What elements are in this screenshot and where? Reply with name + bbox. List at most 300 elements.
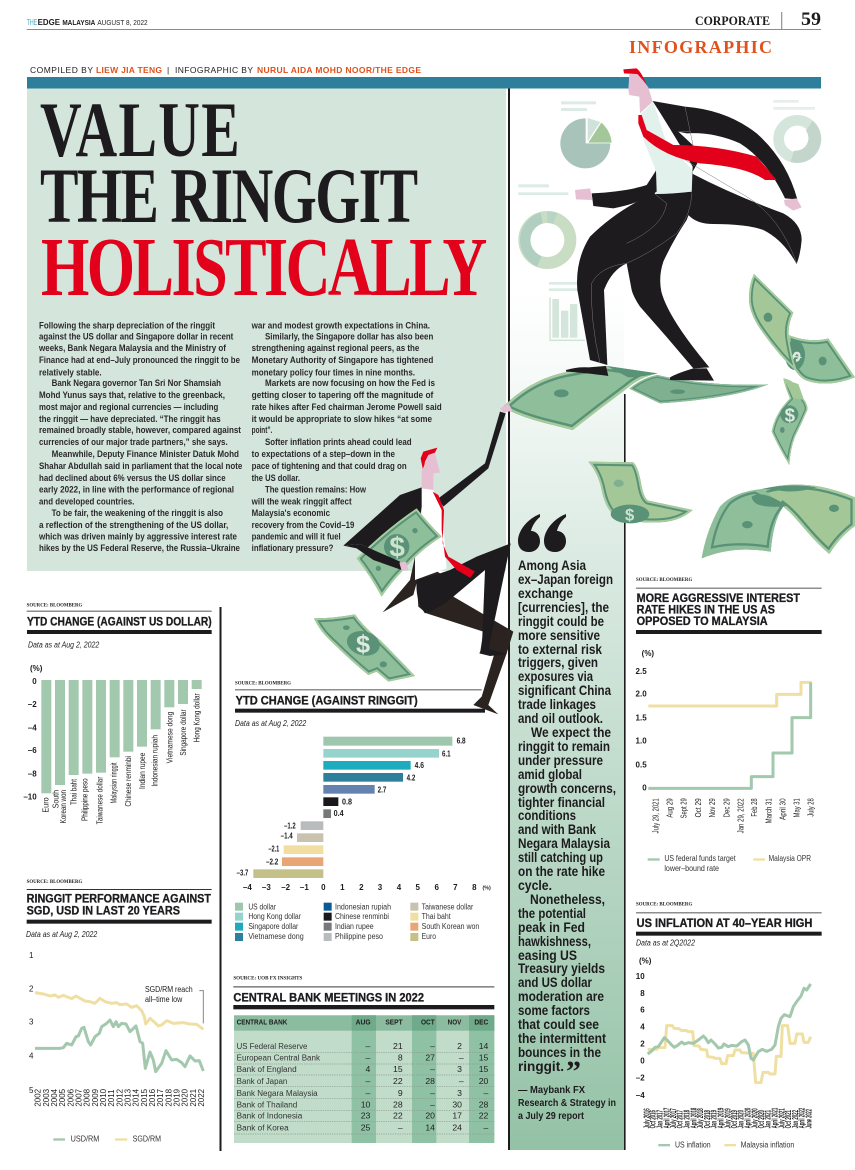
chart: ringgit performance against SGD and USD: all–time low <box>145 995 183 1004</box>
credits line: NURUL AIDA MOHD NOOR/THE EDGE <box>257 65 421 75</box>
table: central bank meetings in 2022: Bank of Japan <box>237 1077 287 1086</box>
chart: YTD change against US dollar: SOURCE: BLOOMBERG <box>27 603 83 609</box>
chart: US inflation at 40-year high <box>636 902 822 1149</box>
chart: ringgit performance against SGD and USD: SGD/RM <box>133 1135 161 1144</box>
chart: ringgit performance against SGD and USD: USD/RM <box>71 1135 99 1144</box>
table: central bank meetings in 2022: 20 <box>479 1076 489 1086</box>
masthead: THE <box>27 18 37 27</box>
table: central bank meetings in 2022: 17 <box>452 1111 462 1121</box>
table: central bank meetings in 2022: 28 <box>425 1076 435 1086</box>
chart: US vs Malaysia interest rates: RATE HIKES IN THE US AS <box>637 604 775 617</box>
credits line <box>30 65 421 75</box>
table: central bank meetings in 2022: Bank of Korea <box>237 1124 289 1133</box>
chart: YTD change against ringgit: 4 <box>397 883 402 892</box>
illustration: businessman carrying banknotes <box>314 403 513 714</box>
chart: YTD change against ringgit: –2.1 <box>268 845 280 854</box>
article text: inflationary pressure? <box>252 543 334 553</box>
chart: US inflation at 40-year high: Oct 2021 <box>784 1110 793 1128</box>
article text: Following the sharp depreciation of the ringgit <box>39 320 215 330</box>
head and hands <box>399 403 513 571</box>
shoe <box>479 644 507 656</box>
chart: ringgit performance against SGD and USD: 2006 <box>66 1088 75 1107</box>
chart: YTD change against ringgit: (%) <box>483 885 491 891</box>
article text: a reflection of the strengthening of the US dollar, <box>39 520 228 530</box>
pull quote text: growth concerns, <box>518 780 616 796</box>
chart: US vs Malaysia interest rates: 1.0 <box>636 737 647 746</box>
table: central bank meetings in 2022: 27 <box>425 1052 435 1062</box>
chart: US vs Malaysia interest rates: Aug 29 <box>666 798 675 818</box>
illustration: businessman carrying banknotes: $ <box>356 630 370 658</box>
section label and page number: CORPORATE <box>695 13 770 28</box>
pull quote text <box>518 557 616 1088</box>
chart: YTD change against ringgit: 2.7 <box>378 786 387 795</box>
chart: YTD change against US dollar: Korean won <box>59 790 68 823</box>
headline panel background <box>27 88 506 571</box>
table: central bank meetings in 2022: – <box>398 1123 403 1133</box>
chart: ringgit performance against SGD and USD: 4 <box>29 1052 34 1061</box>
table: central bank meetings in 2022: 21 <box>393 1041 403 1051</box>
chart: US inflation at 40-year high: Oct 2020 <box>757 1110 766 1128</box>
article text: Similarly, the Singapore dollar has also been <box>265 331 434 341</box>
chart: US vs Malaysia interest rates: March 31 <box>765 798 774 823</box>
pull quote text: some factors <box>518 1002 590 1018</box>
chart: YTD change against ringgit: –4 <box>243 883 252 892</box>
table: central bank meetings in 2022: AUG <box>356 1020 371 1027</box>
chart: YTD change against US dollar: 0 <box>32 677 37 686</box>
table: central bank meetings in 2022: 15 <box>479 1064 489 1074</box>
table: central bank meetings in 2022: – <box>484 1088 489 1098</box>
chart: YTD change against ringgit: 6.8 <box>457 737 466 746</box>
article text: Shahar Abdullah said in parliament that the local note <box>39 461 242 471</box>
table: central bank meetings in 2022: SOURCE: UOB FX INSIGHTS <box>233 976 302 982</box>
chart: ringgit performance against SGD and USD: 2005 <box>58 1088 67 1107</box>
chart: YTD change against US dollar: South <box>51 790 60 808</box>
pull quote text: amid global <box>518 766 582 782</box>
table: central bank meetings in 2022: CENTRAL BANK MEETINGS IN 2022 <box>233 991 424 1004</box>
chart: ringgit performance against SGD and USD: 2004 <box>50 1088 59 1107</box>
article text: had declined about 6% versus the US dollar since <box>39 473 226 483</box>
table: central bank meetings in 2022: DEC <box>474 1020 488 1027</box>
teal band <box>27 77 821 88</box>
article text: the ringgit — have depreciated. “The ringgit has <box>39 414 221 424</box>
title: HOLISTICALLY <box>41 220 487 313</box>
chart: YTD change against ringgit: 8 <box>472 883 477 892</box>
quote mark <box>518 514 566 552</box>
title: THE RINGGIT <box>40 153 418 239</box>
pull quote text: Nonetheless, <box>530 891 605 907</box>
chart: ringgit performance against SGD and USD: 2015 <box>140 1088 149 1107</box>
chart: US vs Malaysia interest rates: MORE AGGRESSIVE INTEREST <box>637 592 800 605</box>
table: central bank meetings in 2022: CENTRAL BANK <box>237 1020 287 1027</box>
pull quote text: ringgit to remain <box>518 738 610 754</box>
masthead: EDGE <box>38 18 61 27</box>
chart: US vs Malaysia interest rates: Nov 29 <box>708 798 717 817</box>
pull quote text: and oil outlook. <box>518 710 603 726</box>
chart: ringgit performance against SGD and USD: 1 <box>29 951 34 960</box>
table: central bank meetings in 2022: European Central Bank <box>237 1053 320 1062</box>
sleeve <box>592 171 657 208</box>
pull quote text: bounces in the <box>518 1044 601 1060</box>
chart: YTD change against ringgit <box>235 681 491 941</box>
carried banknote <box>357 508 442 597</box>
chart: ringgit performance against SGD and USD: 3 <box>29 1018 34 1027</box>
pull quote text: cycle. <box>518 877 552 893</box>
chart: YTD change against ringgit: Data as at Aug 2, 2022 <box>235 719 307 728</box>
chart: YTD change against ringgit: Singapore dollar <box>248 922 299 931</box>
chart: US vs Malaysia interest rates <box>636 577 822 873</box>
chart: YTD change against ringgit: Philippine peso <box>335 932 383 941</box>
article text: getting closer to tapering off the magnitude of <box>252 390 434 400</box>
hair <box>421 448 437 472</box>
article text: the US dollar. <box>252 473 300 483</box>
table: central bank meetings in 2022: 14 <box>479 1041 489 1051</box>
title: VALUE <box>40 87 240 173</box>
chart: YTD change against US dollar: YTD CHANGE (AGAINST US DOLLAR) <box>27 615 212 628</box>
chart: US inflation at 40-year high: Oct 2019 <box>730 1110 739 1128</box>
chart: YTD change against ringgit: YTD CHANGE (AGAINST RINGGIT) <box>236 694 418 707</box>
chart: YTD change against US dollar: Thai baht <box>69 778 78 805</box>
pull quote text: under pressure <box>518 752 603 768</box>
pull quote text: Treasury yields <box>518 960 605 976</box>
title <box>40 87 487 313</box>
table: central bank meetings in 2022: 22 <box>393 1111 403 1121</box>
illustration: falling banknotes: $ <box>781 348 805 364</box>
chart: US inflation at 40-year high: July 2018 <box>696 1108 705 1128</box>
chart: YTD change against US dollar: Hong Kong dollar <box>192 693 201 742</box>
chart: ringgit performance against SGD and USD: 2007 <box>74 1088 83 1107</box>
chart: ringgit performance against SGD and USD: 2016 <box>148 1088 157 1107</box>
table: central bank meetings in 2022: 3 <box>457 1088 462 1098</box>
article text: which was driven mainly by aggressive interest rate <box>38 531 237 541</box>
article text: recovery from the Covid–19 <box>252 520 354 530</box>
background charts behind the figure <box>518 100 821 291</box>
chart: YTD change against ringgit: –3 <box>262 883 271 892</box>
chart: US inflation at 40-year high: April 2019 <box>716 1107 725 1128</box>
chart: ringgit performance against SGD and USD: 2 <box>29 984 34 993</box>
tie <box>638 115 777 180</box>
pull quote text: exposures via <box>518 668 593 684</box>
chart: US inflation at 40-year high: Data as at 2Q2022 <box>636 939 695 948</box>
chart: ringgit performance against SGD and USD: 2017 <box>156 1088 165 1107</box>
chart: YTD change against US dollar: Euro <box>41 797 50 813</box>
table: central bank meetings in 2022: 15 <box>479 1052 489 1062</box>
forearm <box>343 544 402 570</box>
table: central bank meetings in 2022: OCT <box>421 1020 435 1027</box>
article text: hikes by the US Federal Reserve, the Russia–Ukraine <box>39 543 240 553</box>
masthead: MALAYSIA <box>62 18 96 27</box>
article text: Meanwhile, Deputy Finance Minister Datuk Mohd <box>52 449 239 459</box>
article text: will the weak ringgit affect <box>251 496 352 506</box>
chart: US vs Malaysia interest rates: Oct 29 <box>694 798 703 817</box>
chart: YTD change against US dollar: (%) <box>30 664 43 673</box>
article text: war and modest growth expectations in China. <box>251 320 430 330</box>
table: central bank meetings in 2022: 30 <box>452 1099 462 1109</box>
chart: YTD change against US dollar: –8 <box>28 769 37 778</box>
chart: YTD change against ringgit: Indian rupee <box>335 922 374 931</box>
article text: and developed countries. <box>39 496 134 506</box>
table: central bank meetings in 2022: Bank of Indonesia <box>237 1112 303 1121</box>
article text: monetary policy four times in nine months. <box>252 367 415 377</box>
chart: US inflation at 40-year high: Malaysia inflation <box>741 1140 794 1149</box>
article text: early 2022, in line with the performance of regional <box>39 484 234 494</box>
pull quote text: conditions <box>518 807 576 823</box>
quote attribution: Research & Strategy in <box>518 1097 616 1109</box>
pull quote text: exchange <box>518 585 573 601</box>
article text: Softer inflation prints ahead could lead <box>265 437 412 447</box>
shirt <box>415 487 447 580</box>
table: central bank meetings in 2022: 8 <box>398 1052 403 1062</box>
chart: US inflation at 40-year high: 8 <box>640 989 645 998</box>
chart: YTD change against ringgit: 0.4 <box>334 809 344 818</box>
chart: US vs Malaysia interest rates: 2.5 <box>636 667 647 676</box>
chart: YTD change against US dollar: Indonesian rupiah <box>151 735 160 787</box>
illustration: businessman carrying banknotes: $ <box>389 532 405 563</box>
chart: ringgit performance against SGD and USD: 2002 <box>34 1088 43 1107</box>
chart: YTD change against ringgit: South Korean won <box>422 922 479 931</box>
chart: US inflation at 40-year high: Jan 2017 <box>656 1110 665 1128</box>
chart: ringgit performance against SGD and USD: 2014 <box>132 1088 141 1107</box>
pull quote text: and US dollar <box>518 974 592 990</box>
chart: YTD change against US dollar: Philippine peso <box>81 778 90 821</box>
chart: ringgit performance against SGD and USD: 2013 <box>123 1088 132 1107</box>
chart: YTD change against ringgit: Hong Kong dollar <box>248 912 301 921</box>
article text: weeks, Bank Negara Malaysia and the Ministry of <box>38 343 227 353</box>
chart: ringgit performance against SGD and USD: 2022 <box>197 1088 206 1107</box>
table: central bank meetings in 2022: – <box>366 1076 371 1086</box>
article text: Bank Negara governor Tan Sri Nor Shamsiah <box>52 378 221 388</box>
pull quote text: Negara Malaysia <box>518 835 610 851</box>
chart: YTD change against ringgit: Taiwanese dollar <box>422 903 474 912</box>
chart: YTD change against ringgit: 0 <box>321 883 326 892</box>
article text: most major and regional currencies — including <box>39 402 219 412</box>
chart: ringgit performance against SGD and USD: RINGGIT PERFORMANCE AGAINST <box>27 893 211 906</box>
chart: YTD change against ringgit: –1 <box>300 883 309 892</box>
chart: ringgit performance against SGD and USD: SOURCE: BLOOMBERG <box>27 879 83 885</box>
table: central bank meetings in 2022: NOV <box>448 1020 462 1027</box>
pull quote text: [currencies], the <box>518 599 609 615</box>
chart: ringgit performance against SGD and USD: 2011 <box>107 1089 116 1107</box>
table: central bank meetings in 2022: 15 <box>393 1064 403 1074</box>
table: central bank meetings in 2022: 22 <box>393 1076 403 1086</box>
table: central bank meetings in 2022: 4 <box>366 1064 371 1074</box>
table: central bank meetings in 2022: – <box>459 1076 464 1086</box>
article text: pace of tightening and that could drag on <box>252 461 407 471</box>
quote panel background <box>510 290 624 1150</box>
chart: ringgit performance against SGD and USD: 2003 <box>42 1088 51 1107</box>
pull quote text: on the rate hike <box>518 863 605 879</box>
pull quote text: more sensitive <box>518 627 600 643</box>
chart: ringgit performance against SGD and USD: SGD, USD IN LAST 20 YEARS <box>27 905 180 918</box>
table: central bank meetings in 2022: – <box>459 1052 464 1062</box>
chart: US vs Malaysia interest rates: Dec 29 <box>722 798 731 817</box>
article text: To be fair, the weakening of the ringgit is also <box>52 508 223 518</box>
pull quote text: moderation are <box>518 988 604 1004</box>
article text: remained broadly stable, however, compared against <box>39 425 241 435</box>
chart: US vs Malaysia interest rates: April 30 <box>778 798 787 820</box>
chart: YTD change against US dollar: –4 <box>28 723 37 732</box>
table: central bank meetings in 2022: 24 <box>452 1123 462 1133</box>
table: central bank meetings in 2022: – <box>484 1123 489 1133</box>
pull quote text: that could see <box>518 1016 599 1032</box>
table: central bank meetings in 2022: – <box>366 1088 371 1098</box>
chart: US inflation at 40-year high: July 2021 <box>777 1108 786 1128</box>
chart: YTD change against ringgit: –1.2 <box>284 822 296 831</box>
divider rules <box>220 88 626 1151</box>
chart: YTD change against ringgit: 6 <box>434 883 439 892</box>
quote attribution: a July 29 report <box>518 1110 584 1122</box>
shoes <box>566 366 714 381</box>
chart: US inflation at 40-year high: 6 <box>640 1006 645 1015</box>
table: central bank meetings in 2022: 9 <box>398 1088 403 1098</box>
article text: strengthening against regional peers, as the <box>252 343 419 353</box>
credits line: LIEW JIA TENG <box>96 65 162 75</box>
chart: US inflation at 40-year high: April 2020 <box>743 1107 752 1128</box>
chart: US vs Malaysia interest rates: Feb 28 <box>750 798 759 817</box>
table: central bank meetings in 2022: – <box>430 1088 435 1098</box>
chart: YTD change against US dollar <box>23 603 212 824</box>
hair <box>623 68 647 87</box>
chart: US inflation at 40-year high: July 2016 <box>643 1108 652 1128</box>
masthead: AUGUST 8, 2022 <box>97 18 148 27</box>
table: central bank meetings in 2022: – <box>430 1064 435 1074</box>
table: central bank meetings in 2022: 23 <box>361 1111 371 1121</box>
article text: it would be appropriate to slow hikes “at some <box>252 414 432 424</box>
chart: ringgit performance against SGD and USD: 2010 <box>99 1088 108 1107</box>
table: central bank meetings in 2022: 10 <box>361 1099 371 1109</box>
table: central bank meetings in 2022: – <box>366 1052 371 1062</box>
credits line: | <box>167 65 169 75</box>
article text: point”. <box>252 425 272 435</box>
table: central bank meetings in 2022: – <box>430 1099 435 1109</box>
infographic label: INFOGRAPHIC <box>629 37 772 57</box>
pull quote text: Among Asia <box>518 557 586 573</box>
chart: ringgit performance against SGD and USD <box>26 879 212 1144</box>
chart: US vs Malaysia interest rates: 1.5 <box>636 714 647 723</box>
chart: US inflation at 40-year high: April 2022 <box>798 1107 807 1128</box>
chart: YTD change against ringgit: Thai baht <box>422 912 451 921</box>
chart: YTD change against US dollar: Taiwanese dollar <box>96 776 105 824</box>
article text: relatively stable. <box>39 367 102 377</box>
chart: YTD change against US dollar: Vietnamese dong <box>166 712 175 763</box>
chart: YTD change against ringgit: –2.2 <box>266 857 279 866</box>
chart: US vs Malaysia interest rates: Jan 29, 2022 <box>737 798 746 833</box>
masthead <box>27 18 821 30</box>
table: central bank meetings in 2022 <box>233 976 494 1143</box>
chart: YTD change against US dollar: Indian rupee <box>138 752 147 789</box>
article text: Markets are now focusing on how the Fed is <box>265 378 435 388</box>
chart: US inflation at 40-year high: Jan 2021 <box>764 1110 773 1128</box>
chart: US vs Malaysia interest rates: (%) <box>642 649 654 658</box>
table: central bank meetings in 2022: 20 <box>425 1111 435 1121</box>
chart: YTD change against ringgit: –3.7 <box>237 868 249 877</box>
chart: US inflation at 40-year high: Oct 2017 <box>676 1110 685 1128</box>
pull quote text: the potential <box>518 905 586 921</box>
pull quote text: peak in Fed <box>518 919 585 935</box>
chart: US inflation at 40-year high: Jan 2022 <box>791 1110 800 1128</box>
chart: US inflation at 40-year high: US INFLATION AT 40–YEAR HIGH <box>637 917 812 930</box>
pull quote text: to external risk <box>518 641 602 657</box>
shirt <box>640 102 693 194</box>
chart: YTD change against US dollar: Singapore dollar <box>179 709 188 756</box>
pull quote text: ” <box>566 1055 581 1088</box>
chart: YTD change against ringgit: –1.4 <box>281 832 293 841</box>
article text: rate hikes after Fed chairman Jerome Powell said <box>252 402 442 412</box>
chart: US inflation at 40-year high: –4 <box>636 1091 645 1100</box>
article text <box>38 320 442 553</box>
jacket tail <box>383 557 418 612</box>
chart: US inflation at 40-year high: Jan 2019 <box>710 1110 719 1128</box>
chart: YTD change against ringgit: 4.6 <box>415 761 424 770</box>
chart: US inflation at 40-year high: July 2020 <box>750 1108 759 1128</box>
jacket seams <box>591 107 797 363</box>
chart: US vs Malaysia interest rates: 0 <box>642 784 647 793</box>
rear leg <box>415 557 513 714</box>
jacket <box>343 412 511 653</box>
article text: The question remains: How <box>265 484 367 494</box>
illustration: businessman running on banknotes <box>566 68 802 381</box>
chart: YTD change against US dollar: –2 <box>28 700 37 709</box>
chart: US inflation at 40-year high: 0 <box>640 1057 645 1066</box>
chart: YTD change against ringgit: 1 <box>340 883 345 892</box>
table: central bank meetings in 2022: 25 <box>361 1123 371 1133</box>
pull quote text: ringgit could be <box>518 613 604 629</box>
table: central bank meetings in 2022: – <box>366 1041 371 1051</box>
trousers <box>577 192 709 368</box>
chart: US vs Malaysia interest rates: SOURCE: BLOOMBERG <box>636 577 693 583</box>
pull quote text: trade linkages <box>518 696 596 712</box>
chart: US vs Malaysia interest rates: OPPOSED TO MALAYSIA <box>637 615 768 628</box>
chart: YTD change against ringgit: 2 <box>359 883 364 892</box>
chart: US inflation at 40-year high: April 2018 <box>689 1107 698 1128</box>
pull quote text: tighter financial <box>518 794 605 810</box>
chart: US vs Malaysia interest rates: 0.5 <box>636 760 647 769</box>
table: central bank meetings in 2022: Bank of England <box>237 1065 297 1074</box>
chart: US inflation at 40-year high: 4 <box>640 1023 645 1032</box>
table: central bank meetings in 2022: Bank of Thailand <box>237 1100 297 1109</box>
table: central bank meetings in 2022: SEPT <box>385 1020 403 1027</box>
chart: US inflation at 40-year high: SOURCE: BLOOMBERG <box>636 902 693 908</box>
table: central bank meetings in 2022: 28 <box>479 1099 489 1109</box>
chart: US vs Malaysia interest rates: lower–bound rate <box>664 864 719 873</box>
table: central bank meetings in 2022: 14 <box>425 1123 435 1133</box>
chart: US inflation at 40-year high: July 2017 <box>669 1108 678 1128</box>
quote attribution <box>518 1084 616 1122</box>
chart: US inflation at 40-year high: Oct 2018 <box>703 1110 712 1128</box>
chart: US vs Malaysia interest rates: July 28 <box>807 798 816 817</box>
article text: Mohd Yunus says that, relative to the greenback, <box>39 390 225 400</box>
illustration: falling banknotes: $ <box>785 404 796 425</box>
pull quote text: easing US <box>518 947 577 963</box>
pull quote text: the intermittent <box>518 1030 606 1046</box>
chart: YTD change against ringgit: 4.2 <box>407 774 416 783</box>
jacket <box>653 101 802 264</box>
falling banknote <box>314 614 415 682</box>
article text: Monetary Authority of Singapore has tightened <box>252 355 434 365</box>
pull quote text: still catching up <box>518 849 603 865</box>
table: central bank meetings in 2022: Bank Negara Malaysia <box>237 1089 318 1098</box>
illustration: falling banknotes: $ <box>625 506 635 525</box>
chart: YTD change against ringgit: Euro <box>422 932 436 941</box>
article text: currencies of our major trade partners,” she says. <box>39 437 228 447</box>
chart: US vs Malaysia interest rates: Malaysia OPR <box>769 854 811 863</box>
chart: ringgit performance against SGD and USD: Data as at Aug 2, 2022 <box>26 930 98 939</box>
article text: Finance had at end–July pronounced the ringgit to be <box>39 355 240 365</box>
chart: US inflation at 40-year high: April 2017 <box>662 1107 671 1128</box>
chart: US inflation at 40-year high: June 2022 <box>804 1109 813 1128</box>
chart: US inflation at 40-year high: April 2021 <box>771 1107 780 1128</box>
table: central bank meetings in 2022: US Federal Reserve <box>237 1042 308 1051</box>
chart: YTD change against ringgit: Vietnamese dong <box>248 932 304 941</box>
